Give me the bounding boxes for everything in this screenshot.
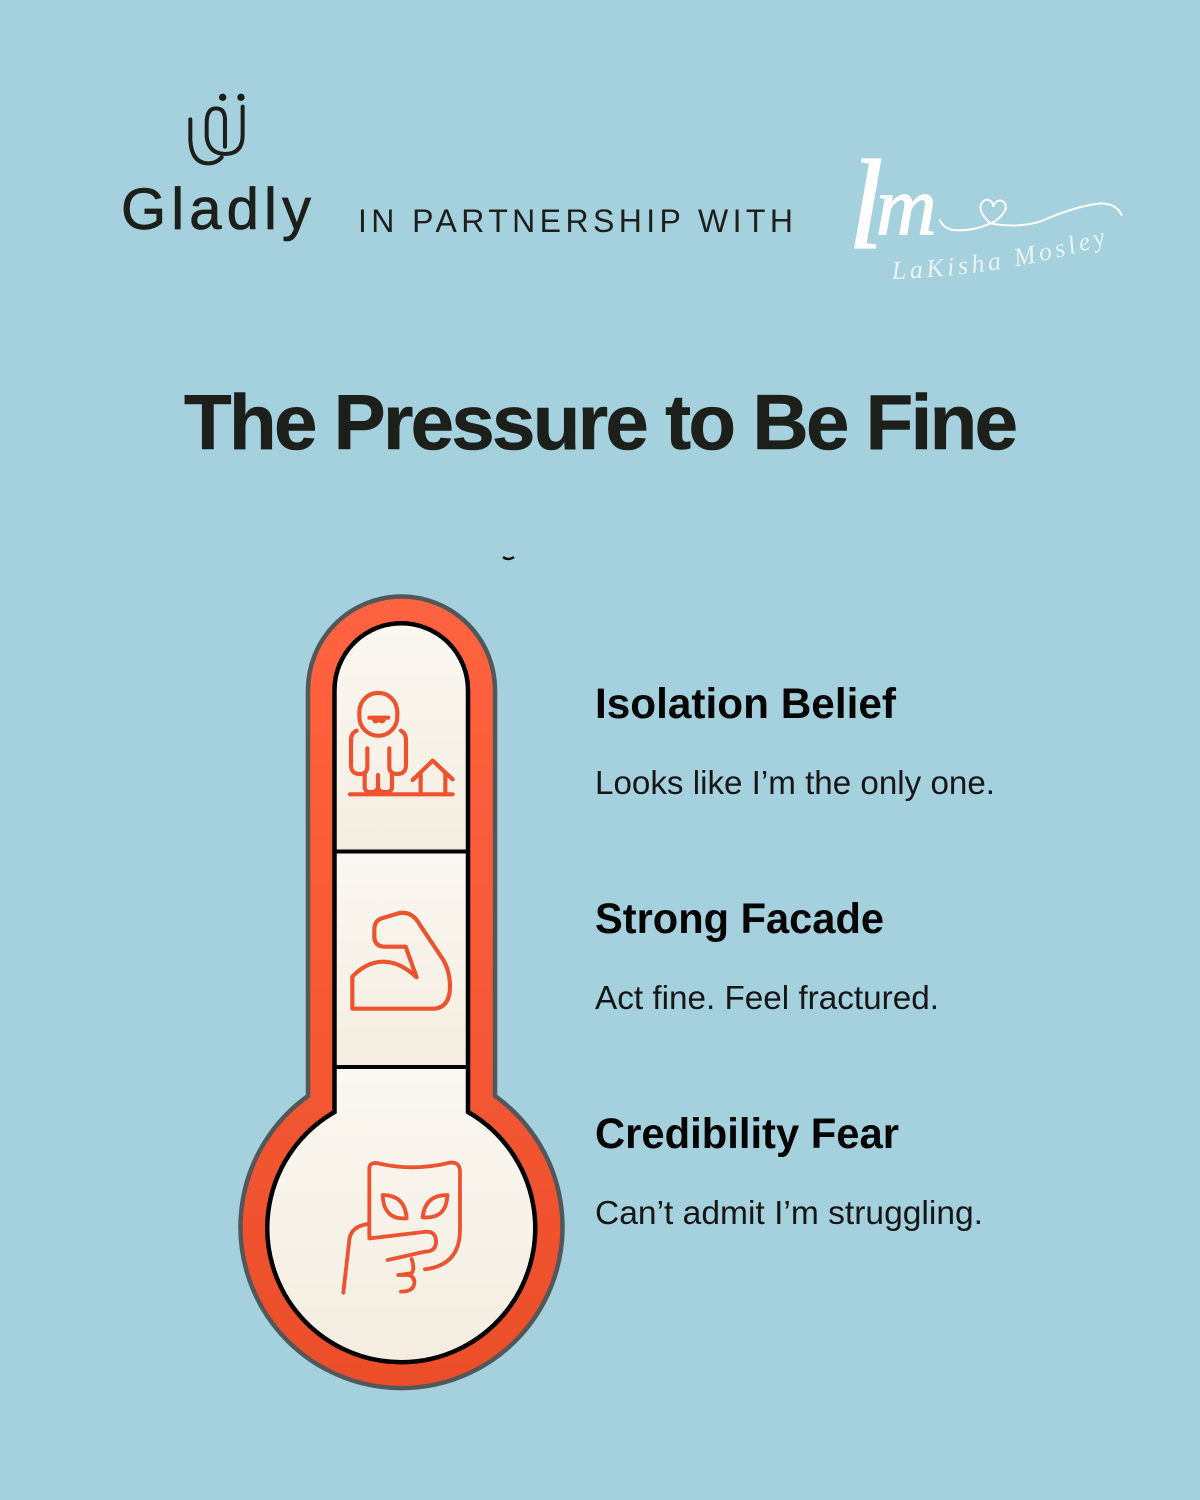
icon: Gladly paperclip smile xyxy=(190,94,245,163)
segment: bulb xyxy=(267,1067,535,1362)
thermometer inner outline xyxy=(267,623,535,1362)
logo: Gladly xyxy=(121,94,311,242)
small stray mark xyxy=(503,557,514,559)
item: Credibility Fear xyxy=(595,1110,983,1231)
name: LaKisha Mosley: LaKisha Mosley xyxy=(892,232,1104,279)
wordmark: Gladly: Gladly xyxy=(121,177,311,242)
text: Strong Facade description: Act fine. Feel fractured. xyxy=(595,979,939,1016)
icon: isolated person beside house xyxy=(350,693,453,794)
segment: top tube xyxy=(334,623,468,851)
thermometer xyxy=(240,596,562,1388)
partnership text: IN PARTNERSHIP WITH xyxy=(358,203,793,239)
heading: Credibility Fear: Credibility Fear xyxy=(595,1110,899,1158)
divider upper xyxy=(334,850,468,854)
monogram: lm: l xyxy=(848,134,884,276)
heading: Isolation Belief: Isolation Belief xyxy=(595,680,897,728)
text: Isolation Belief description: Looks like I’m the only one. xyxy=(595,764,995,801)
text: Credibility Fear description: Can’t admit I’m struggling. xyxy=(595,1194,983,1231)
logo: LaKisha Mosley xyxy=(848,134,1123,279)
icon: flexed bicep xyxy=(352,913,450,1009)
monogram: lm: m xyxy=(876,160,937,253)
divider lower xyxy=(334,1065,468,1069)
title: The Pressure to Be Fine xyxy=(184,378,1018,466)
segment: middle tube xyxy=(334,851,468,1067)
thermometer outer casing xyxy=(240,596,562,1388)
item: Isolation Belief xyxy=(595,680,995,801)
flourish with heart xyxy=(940,200,1122,230)
heading: Strong Facade: Strong Facade xyxy=(595,895,884,943)
icon: hand holding mask xyxy=(343,1163,460,1293)
item: Strong Facade xyxy=(595,895,939,1016)
